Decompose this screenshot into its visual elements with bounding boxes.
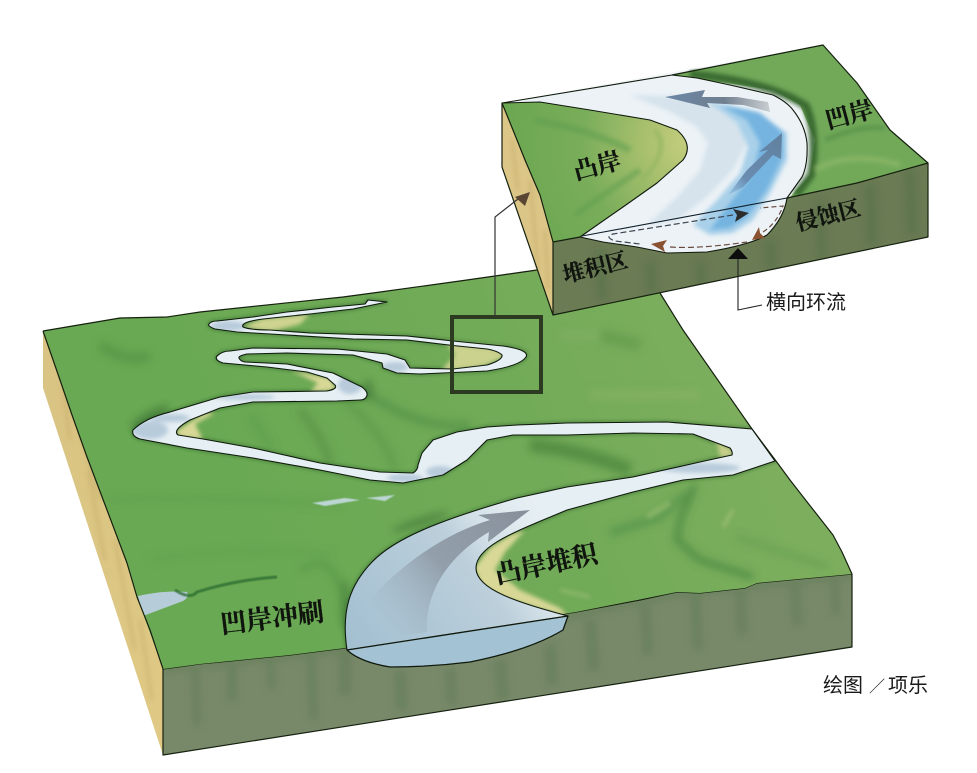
credit: 绘图 bbox=[823, 675, 863, 697]
panel: main river block bbox=[40, 270, 855, 760]
front soil wall bbox=[160, 570, 855, 760]
panel: inset river bend block bbox=[500, 45, 930, 320]
label: concave bank erosion: 凹岸冲刷 bbox=[219, 598, 326, 639]
inset water bbox=[582, 76, 806, 252]
terrain shading bbox=[100, 335, 700, 590]
green land surface bbox=[43, 270, 852, 669]
dark outer-bend spots bbox=[128, 380, 450, 630]
callout: transverse circulation: 横向环流 bbox=[766, 291, 846, 314]
right concave bank land bbox=[502, 45, 928, 242]
pond bbox=[138, 592, 188, 616]
callout: transverse circulation bbox=[728, 248, 846, 314]
water tint patches bbox=[132, 321, 740, 482]
inset water outline bbox=[502, 75, 807, 253]
shading: lower right ridges bbox=[610, 485, 827, 577]
credit: ／ bbox=[869, 679, 885, 696]
left tan side wall bbox=[40, 325, 165, 760]
inset label: deposition zone: 堆积区 bbox=[560, 247, 630, 288]
leader arrow from square to inset bbox=[495, 192, 530, 317]
front wall outline bbox=[163, 574, 852, 755]
flow arrow on big bend bbox=[384, 510, 530, 632]
shading: lower right pale streaks bbox=[560, 503, 733, 597]
detail locator square bbox=[452, 317, 541, 392]
shallow water marks bbox=[312, 495, 395, 506]
river channel cross-section bbox=[347, 616, 568, 667]
inset label: concave bank: 凹岸 bbox=[823, 96, 876, 135]
left convex bank land bbox=[502, 102, 687, 242]
label: convex bank deposition: 凸岸堆积 bbox=[492, 539, 602, 589]
inset label: erosion zone: 侵蚀区 bbox=[793, 195, 863, 236]
inset tan side wall bbox=[502, 103, 553, 315]
inset label: convex bank: 凸岸 bbox=[571, 147, 624, 186]
inset front wall bbox=[550, 160, 930, 320]
shading: inner bend dark patch bbox=[530, 445, 630, 470]
credit: 项乐 bbox=[888, 674, 928, 697]
inset top surface bbox=[500, 45, 928, 260]
big bend water colour bbox=[346, 506, 564, 650]
transverse circulation bbox=[609, 206, 783, 252]
water surface line bbox=[582, 198, 787, 236]
point bars bbox=[175, 314, 733, 618]
inset top flow arrow bbox=[665, 90, 770, 112]
inset side flow arrow bbox=[728, 133, 782, 195]
jagged land outline bbox=[43, 270, 852, 669]
inset outline bbox=[502, 45, 928, 315]
river bbox=[132, 300, 775, 667]
river bank shadows bbox=[133, 300, 775, 650]
gully bbox=[175, 577, 277, 596]
